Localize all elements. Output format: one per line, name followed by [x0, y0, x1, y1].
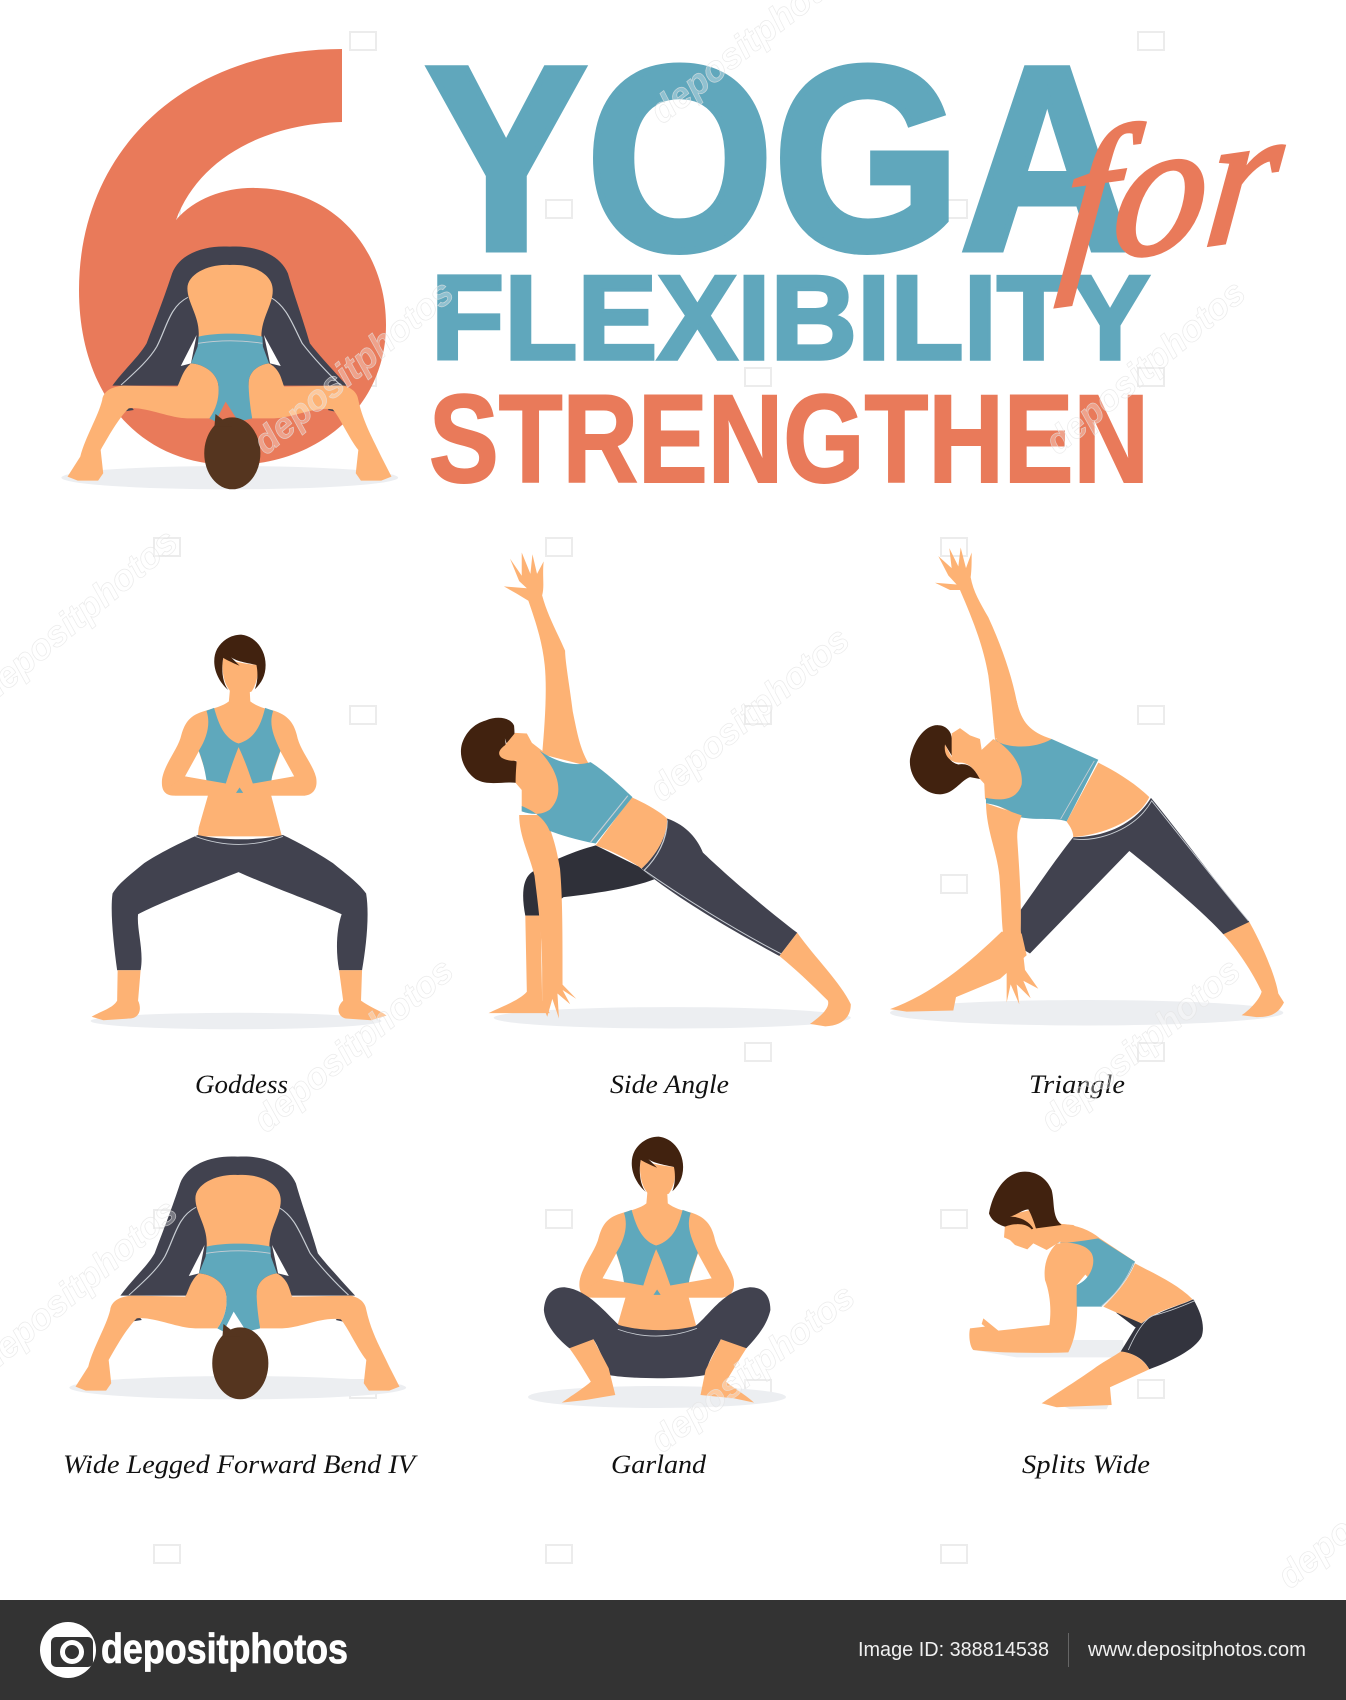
back — [1060, 1224, 1135, 1283]
logo wordmark: depositphotos — [101, 1625, 348, 1672]
big numeral 6 — [79, 49, 386, 465]
bent front thigh — [523, 845, 654, 916]
leggings — [1021, 798, 1249, 953]
shins and feet — [562, 1339, 754, 1403]
title: YOGA: YOGA — [426, 12, 1134, 305]
waistband stitch — [195, 836, 283, 844]
watermarks: depositphotos — [1032, 949, 1248, 1140]
sports top — [986, 739, 1098, 822]
label: Triangle: Triangle — [1029, 1070, 1125, 1099]
watermarks: depositphotos — [1037, 271, 1253, 462]
upper body — [579, 1137, 734, 1338]
pose: garland — [528, 1137, 786, 1408]
hero figure: wide legged forward bend — [61, 246, 398, 489]
pose: wide legged forward bend — [69, 1156, 406, 1399]
ground shadow — [494, 1007, 851, 1029]
pose: goddess — [91, 635, 387, 1029]
watermarks: depositphotos — [642, 1275, 862, 1460]
hair — [461, 718, 517, 783]
watermarks: depositphotos — [641, 618, 857, 809]
top stitch — [1102, 1263, 1133, 1306]
top stitch — [1061, 761, 1094, 819]
raised arm — [935, 547, 1052, 752]
feet — [92, 970, 387, 1020]
ground shadow — [91, 1013, 381, 1029]
label: Splits Wide: Splits Wide — [1022, 1450, 1150, 1479]
top stitch — [591, 796, 628, 842]
image id: Image ID: 388814538 — [858, 1639, 1049, 1661]
belly — [1067, 763, 1149, 837]
pose: side angle — [461, 552, 851, 1029]
title: STRENGTHEN: STRENGTHEN — [429, 370, 1149, 509]
front leg and foot — [890, 932, 1027, 1012]
pose: triangle — [890, 547, 1284, 1025]
raised arm — [504, 552, 591, 767]
footer bar — [0, 1600, 1346, 1700]
belly — [596, 797, 667, 869]
website: www.depositphotos.com — [1087, 1639, 1306, 1661]
leggings — [544, 1287, 770, 1378]
watermarks: depositphotos — [245, 271, 461, 462]
hair — [910, 725, 980, 794]
back leg leggings — [642, 819, 797, 956]
face and neck — [1004, 1208, 1090, 1250]
label: Side Angle: Side Angle — [610, 1070, 729, 1099]
face and chest — [499, 733, 565, 817]
ground shadows — [973, 1340, 1123, 1409]
sports top — [522, 751, 632, 844]
belly — [1103, 1263, 1193, 1323]
back calf and foot — [779, 933, 851, 1026]
sports top — [1057, 1238, 1135, 1307]
label: Goddess: Goddess — [195, 1070, 288, 1099]
back calf and foot — [1223, 922, 1284, 1017]
shorts — [1121, 1299, 1203, 1369]
leggings stitch — [1073, 801, 1248, 921]
shoulder fill — [993, 701, 1052, 752]
lower arm and hand — [986, 803, 1038, 1004]
watermarks: depositphotos — [245, 949, 461, 1140]
logo icon: camera — [40, 1622, 96, 1678]
leggings stitch — [644, 820, 782, 954]
title: script for: for — [1054, 66, 1293, 307]
arm — [969, 1243, 1093, 1353]
label: Wide Legged Forward Bend IV: Wide Legged Forward Bend IV — [63, 1450, 418, 1479]
front shin and foot — [489, 916, 550, 1013]
lower arm and hand — [519, 815, 576, 1019]
shorts stitch — [1128, 1301, 1195, 1350]
hair — [989, 1172, 1062, 1229]
upper body — [162, 635, 317, 836]
watermark camera icons — [154, 32, 1164, 1563]
legs — [544, 1287, 770, 1403]
title: FLEXIBILITY: FLEXIBILITY — [431, 251, 1150, 385]
label: Garland: Garland — [611, 1450, 707, 1479]
ground shadow — [528, 1386, 786, 1408]
chest — [983, 739, 1023, 817]
leg and foot — [1042, 1352, 1149, 1407]
leggings — [112, 835, 368, 970]
back leg strip — [1116, 1313, 1143, 1328]
ground shadow — [890, 1000, 1283, 1025]
waistband stitch — [618, 1328, 697, 1336]
pose: splits wide — [969, 1172, 1203, 1409]
face — [945, 728, 993, 784]
